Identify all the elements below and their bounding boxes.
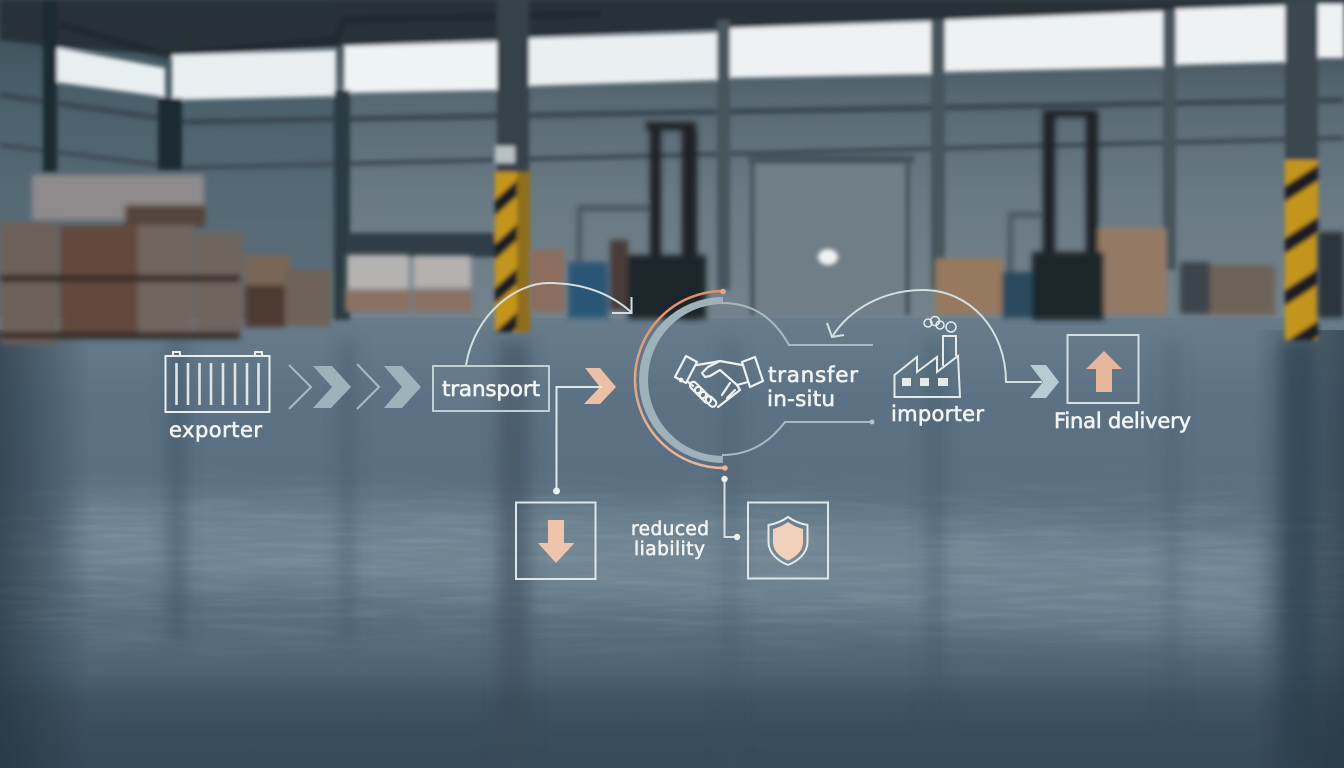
label: reduced liability (631, 519, 709, 560)
lower dark strip behind pallets (345, 233, 495, 257)
orange arc (635, 291, 725, 468)
icon: factory (894, 316, 960, 397)
hazard columns (497, 0, 529, 172)
label: reduced liability: liability (634, 539, 705, 560)
pallets right (935, 258, 1003, 314)
windows (55, 47, 165, 97)
wall rails (0, 95, 1344, 122)
floor (0, 318, 1344, 768)
arrow: curved from importer region back to transfer circle and on to delivery (827, 290, 1042, 382)
grey thick arc (639, 297, 723, 463)
label: exporter: exporter (169, 418, 262, 442)
transfer in-situ circle: in-situ (767, 387, 835, 412)
transfer in-situ circle (635, 289, 874, 471)
pallets middle (347, 255, 409, 289)
floor streak texture (45, 506, 1270, 634)
label: transfer in-situ: transfer (768, 363, 858, 388)
label: importer: importer (891, 402, 984, 426)
floor reflections (168, 340, 1314, 768)
floor light patch (70, 497, 1270, 640)
transport box (433, 366, 549, 411)
down arrow box (516, 502, 596, 579)
left wall, darker blue (0, 0, 335, 320)
icon: handshake (675, 356, 763, 408)
connector: circle to reduced liability (721, 476, 740, 540)
importer: factory icon and label (891, 316, 984, 426)
icon: shield (768, 517, 808, 565)
label: reduced liability: reduced (631, 519, 709, 540)
arrow: peach chevron with branch to down box (553, 368, 616, 494)
icon: shipping container (166, 352, 270, 412)
ceiling (0, 0, 1344, 55)
roller door (748, 155, 914, 163)
chevron arrows exporter to transport (289, 364, 421, 409)
thin columns (43, 0, 57, 172)
shield box (748, 502, 828, 578)
door light (818, 249, 838, 265)
forklift left (576, 205, 650, 280)
exporter: container icon and label (166, 352, 270, 442)
chevron arrow to final delivery (1030, 365, 1059, 398)
arrow: transport curving to transfer circle (466, 283, 632, 365)
thin outline (722, 303, 873, 345)
label: final delivery: Final delivery (1054, 409, 1191, 433)
pallets left (32, 175, 204, 220)
final delivery box (1068, 335, 1138, 403)
forklift right (1007, 212, 1042, 280)
transport box: transport (442, 377, 540, 402)
